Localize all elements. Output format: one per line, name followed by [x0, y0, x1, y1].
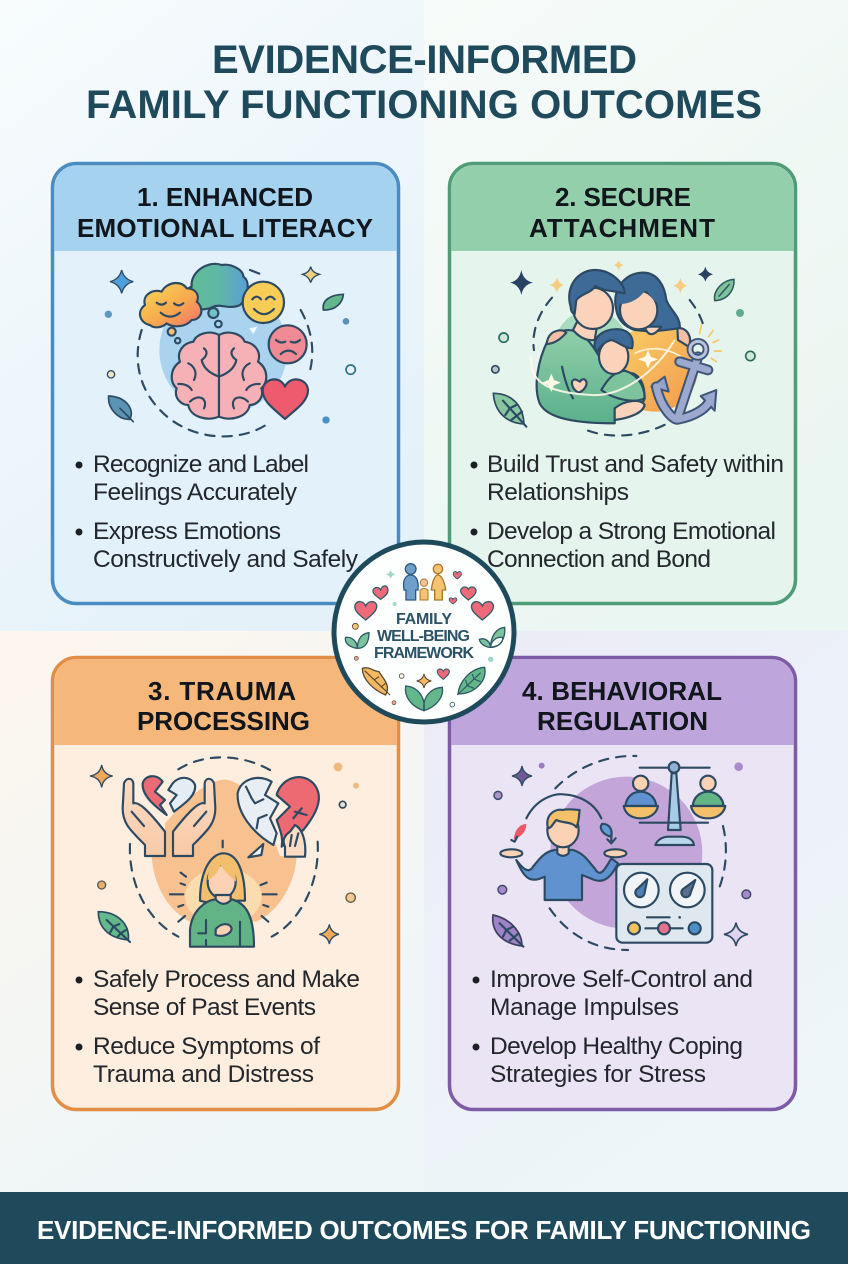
heading: panel 1: 1. ENHANCED [137, 182, 313, 212]
bullet list: panel 2: Relationships [487, 479, 629, 506]
bullet list: panel 4: Develop Healthy Coping [490, 1033, 743, 1060]
heading: panel 3: PROCESSING [137, 706, 310, 736]
heading: panel 2 [529, 182, 715, 243]
bullet list: panel 1: Express Emotions [93, 518, 281, 545]
badge text: WELL-BEING [377, 628, 470, 645]
footer banner [0, 1192, 848, 1264]
badge text: FRAMEWORK [374, 645, 474, 662]
badge text: FAMILY [396, 611, 452, 628]
title [86, 38, 762, 127]
panel: secure attachment [450, 164, 796, 604]
bullet list: panel 3: Trauma and Distress [93, 1061, 314, 1088]
bullet list: panel 3: Sense of Past Events [93, 994, 316, 1021]
heading: panel 2: ATTACHMENT [529, 213, 715, 243]
icon: person, balance and control panel [493, 756, 751, 950]
icon: brain with emotions [105, 264, 355, 436]
central badge: family well-being framework [334, 542, 514, 722]
heading: panel 3: 3. TRAUMA [148, 676, 296, 706]
icon: family embrace with anchor [492, 260, 755, 436]
bullet list: panel 3 [76, 966, 360, 1088]
bullet list: panel 4: Strategies for Stress [490, 1061, 706, 1088]
heading: panel 4: 4. BEHAVIORAL [522, 676, 722, 706]
footer banner: EVIDENCE-INFORMED OUTCOMES FOR FAMILY FUNCTIONING [37, 1215, 811, 1245]
heading: panel 1: EMOTIONAL LITERACY [77, 213, 373, 243]
icon: broken hearts and person healing [90, 757, 359, 947]
bullet list: panel 4: Improve Self-Control and [490, 966, 753, 993]
heading: panel 4 [522, 676, 722, 736]
title: EVIDENCE-INFORMED [212, 38, 637, 82]
heading: panel 2: 2. SECURE [555, 182, 691, 212]
bullet list: panel 2: Connection and Bond [487, 546, 711, 573]
bullet list: panel 1: Feelings Accurately [93, 479, 298, 506]
bullet list: panel 1: Constructively and Safely [93, 546, 359, 573]
bullet list: panel 3: Safely Process and Make [93, 966, 360, 993]
panel: trauma processing [52, 658, 398, 1110]
bullet list: panel 3: Reduce Symptoms of [93, 1033, 320, 1060]
badge artwork [345, 564, 505, 711]
heading: panel 1 [77, 182, 373, 243]
bullet list: panel 2: Build Trust and Safety within [487, 451, 784, 478]
bullet list: panel 1: Recognize and Label [93, 451, 309, 478]
bullet list: panel 1 [76, 451, 359, 573]
heading: panel 4: REGULATION [537, 706, 708, 736]
title: FAMILY FUNCTIONING OUTCOMES [86, 83, 762, 127]
heading: panel 3 [137, 676, 310, 736]
badge text [374, 611, 474, 662]
bullet list: panel 2: Develop a Strong Emotional [487, 518, 776, 545]
bullet list: panel 2 [470, 451, 784, 573]
panel: behavioral regulation [450, 658, 796, 1110]
bullet list: panel 4: Manage Impulses [490, 994, 679, 1021]
panel: enhanced emotional literacy [52, 164, 398, 604]
bullet list: panel 4 [472, 966, 753, 1088]
